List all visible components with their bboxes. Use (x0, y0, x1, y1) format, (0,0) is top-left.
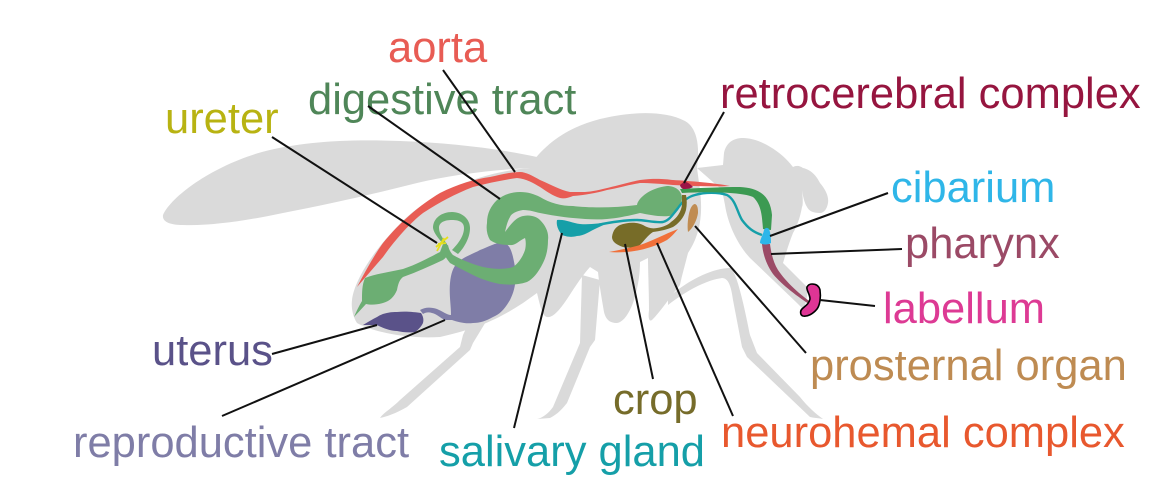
label: retrocerebral complex: retrocerebral complex (720, 70, 1141, 118)
wing (163, 140, 537, 225)
insect silhouette (163, 113, 828, 419)
prosternal organ (688, 204, 698, 232)
label: cibarium: cibarium (891, 164, 1055, 212)
reproductive tract (420, 242, 516, 323)
label: neurohemal complex: neurohemal complex (721, 409, 1125, 457)
pharynx (762, 244, 815, 306)
hind leg (380, 315, 490, 418)
midgut and proventriculus (442, 186, 682, 285)
front leg (668, 268, 823, 419)
leader lines (222, 70, 902, 428)
label: labellum: labellum (883, 285, 1045, 333)
label: salivary gland: salivary gland (439, 428, 705, 476)
label: crop: crop (613, 376, 698, 424)
thorax (520, 113, 701, 323)
uterus (363, 312, 423, 332)
neurohemal complex (609, 229, 678, 252)
label: pharynx: pharynx (905, 220, 1060, 268)
aorta (357, 172, 730, 287)
labellum (801, 284, 820, 316)
foregut (680, 187, 772, 230)
label: prosternal organ: prosternal organ (810, 342, 1127, 390)
hindgut loop and rectum (354, 212, 470, 317)
label: aorta: aorta (388, 24, 488, 72)
crop (612, 195, 687, 248)
label: reproductive tract: reproductive tract (73, 419, 409, 467)
digestive tract (354, 186, 682, 317)
middle leg (537, 275, 600, 419)
label: digestive tract: digestive tract (308, 76, 576, 124)
head (697, 138, 828, 309)
abdomen (352, 168, 590, 337)
retrocerebral complex (680, 182, 693, 189)
cibarium (760, 228, 771, 244)
label: ureter: ureter (165, 95, 279, 143)
salivary gland (557, 193, 762, 237)
ureter (436, 237, 448, 251)
label: uterus: uterus (152, 327, 273, 375)
